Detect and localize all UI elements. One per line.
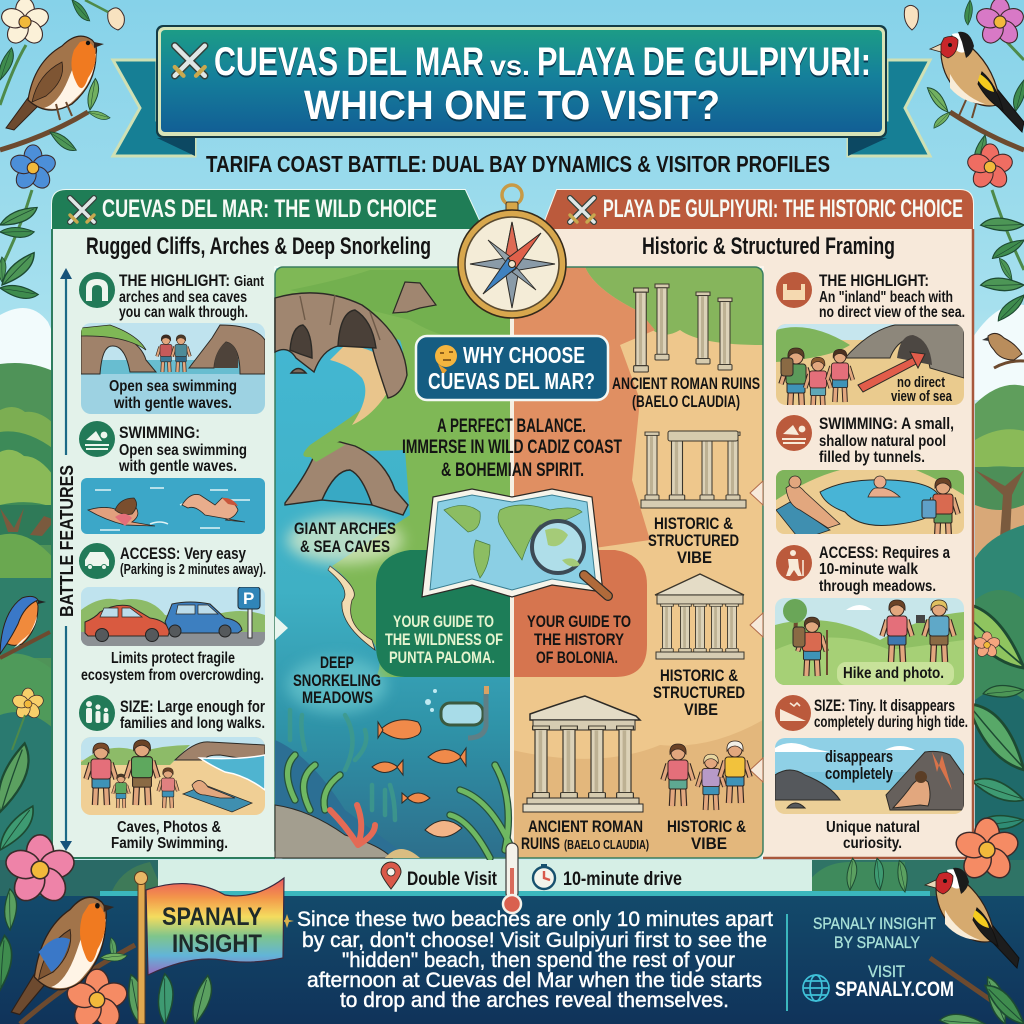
label: giant arches: [294, 519, 396, 556]
label: historic vibe two: HISTORIC &: [660, 666, 738, 685]
text: highlight: THE HIGHLIGHT:: [119, 271, 230, 290]
arrow: battle features: [57, 268, 77, 851]
feature: access right: [775, 543, 964, 685]
caption: [825, 748, 894, 783]
caption: view of sea: [891, 389, 953, 405]
illustration: fish group: [372, 720, 466, 837]
text: access: [819, 543, 950, 595]
panel: Playa de Gulpiyuri: [542, 190, 973, 858]
icon: car: [79, 543, 115, 579]
feature: highlight left: [79, 271, 265, 414]
icon: map pin: [381, 862, 401, 889]
central illustrated map: [275, 267, 763, 858]
heading line one: CUEVAS DEL MAR: [214, 40, 484, 84]
label: deep snorkeling: DEEP: [320, 653, 354, 672]
decorative top-right flora: [904, 0, 1024, 321]
feature: highlight right: [776, 271, 965, 410]
panel subheading: Rugged Cliffs, Arches & Deep Snorkeling: [86, 233, 431, 260]
icon: red flower: [965, 144, 1015, 191]
text: size: SIZE: Large enough for: [120, 697, 265, 716]
text: spanaly insight body: "hidden" beach, then spend the rest of your: [342, 948, 735, 972]
guide blocks: [376, 550, 512, 677]
callout: why choose: [416, 336, 608, 400]
icon: swords: [570, 198, 594, 222]
icon: swimmer: [776, 415, 812, 451]
text: size: [814, 697, 968, 731]
text: attribution: [813, 914, 954, 1001]
icon: coral flower: [953, 818, 1021, 883]
label: deep snorkeling: SNORKELING: [293, 671, 381, 690]
icon: blue flower: [8, 145, 58, 192]
label: ancient roman ruins bottom: ANCIENT ROMAN: [528, 817, 643, 836]
text: access: ACCESS: Requires a: [819, 543, 950, 562]
icon: goldfinch footer: [925, 868, 1019, 968]
icon: sparkle: [280, 914, 294, 928]
icon: arch: [79, 272, 115, 308]
icon: pink flower: [2, 835, 78, 906]
text: swimming: shallow natural pool: [819, 433, 946, 450]
text: guide wildness: YOUR GUIDE TO: [393, 613, 494, 631]
illustration: natural pool: [776, 470, 964, 540]
text: size: SIZE: Tiny. It disappears: [814, 697, 955, 715]
label: giant arches: GIANT ARCHES: [294, 519, 396, 538]
label: deep snorkeling: MEADOWS: [302, 688, 373, 707]
illustration: hidden cave: [776, 324, 964, 410]
text: spanaly insight body: [297, 907, 773, 1012]
caption: Open sea swimming: [109, 378, 237, 395]
label: historic vibe three: HISTORIC &: [667, 817, 746, 836]
heading line one: vs.: [490, 50, 530, 81]
illustration: family beach: [81, 737, 265, 815]
panel header: [52, 190, 483, 229]
caption: ecosystem from overcrowding.: [81, 667, 264, 684]
text: size: families and long walks.: [120, 715, 265, 732]
icon: stopwatch: [533, 864, 555, 889]
label: historic vibe one: [648, 514, 739, 567]
icon: yellow flower left: [11, 688, 45, 720]
heading line two: WHICH ONE TO VISIT?: [304, 82, 720, 128]
text: access: ACCESS: Very easy: [120, 544, 246, 563]
illustration: arches scene: [81, 323, 265, 414]
strip: double visit: [100, 860, 930, 896]
text: guide wildness: [385, 613, 503, 667]
label: ancient roman ruins bottom: (BAELO CLAUDIA): [564, 837, 649, 852]
icon: tide slope: [775, 695, 811, 731]
panel pointers: [275, 616, 288, 782]
bottom-right flora: [842, 818, 1024, 1024]
label: historic vibe three: [667, 817, 746, 853]
footer bar: [0, 896, 1024, 1024]
text: swimming: filled by tunnels.: [819, 449, 925, 466]
title banner: [113, 25, 930, 156]
illustration: parked cars: [81, 587, 265, 646]
text: guide history: OF BOLONIA.: [536, 649, 618, 667]
label: historic vibe two: [653, 666, 745, 719]
text: spanaly insight body: by car, don't choose! Visit Gulpiyuri first to see the: [302, 928, 767, 952]
icon: goldfinch top right: [930, 32, 1024, 132]
caption: with gentle waves.: [113, 395, 232, 412]
icon: family: [79, 695, 115, 731]
caption: Caves, Photos &: [117, 819, 221, 836]
text: size: completely during high tide.: [814, 714, 968, 731]
icon: cream bud: [108, 8, 124, 30]
label: ancient roman ruins bottom: RUINS: [521, 834, 560, 853]
panel subheading: Historic & Structured Framing: [642, 233, 895, 260]
decorative right leaves: [952, 588, 1024, 833]
ruins: colonnade: [641, 431, 746, 508]
illustration: swimmers: [81, 478, 265, 534]
strip: double visit: Double Visit: [407, 869, 498, 890]
ruins: four columns: [634, 284, 732, 372]
icon: parking sign: [238, 587, 260, 638]
illustration: big sea cave: [275, 293, 407, 398]
panel: Cuevas del Mar: [52, 190, 483, 858]
caption pill: [837, 662, 954, 685]
text: access: 10-minute walk: [819, 561, 918, 578]
text: perfect balance: IMMERSE IN WILD CADIZ COAST: [402, 437, 622, 458]
caption: curiosity.: [843, 835, 902, 852]
label: historic vibe three: VIBE: [691, 834, 727, 853]
icon: snorkel mask: [425, 686, 489, 738]
text: perfect balance: [402, 416, 622, 481]
flag: spanaly insight: INSIGHT: [172, 930, 262, 958]
text: attribution: VISIT: [868, 962, 905, 981]
text: attribution: SPANALY INSIGHT: [813, 914, 936, 933]
caption: Limits protect fragile: [111, 650, 235, 667]
compass: [458, 185, 566, 318]
text: guide history: THE HISTORY: [534, 631, 624, 649]
text: highlight: you can walk through.: [119, 304, 248, 321]
bottom-left flora: [0, 835, 221, 1024]
icon: small brown bird: [982, 333, 1024, 368]
text: spanaly insight body: to drop and the arches reveal themselves.: [340, 988, 729, 1012]
icon: globe: [803, 975, 829, 1001]
label: historic vibe one: VIBE: [677, 548, 712, 567]
thermometer: [503, 843, 521, 913]
label: historic vibe one: STRUCTURED: [648, 531, 739, 550]
icon: robin footer: [11, 897, 114, 1014]
icon: purple flower: [974, 0, 1024, 47]
icon: robin top left: [6, 36, 104, 130]
caption: [826, 819, 920, 852]
label: battle features: BATTLE FEATURES: [57, 465, 77, 617]
text: access: [120, 544, 266, 578]
text: access: (Parking is 2 minutes away).: [120, 561, 266, 578]
right half: base: [514, 268, 762, 759]
feature: swimming right: [776, 414, 964, 540]
caption: disappears: [825, 748, 893, 766]
left half: sea: [276, 339, 510, 858]
caption: [81, 650, 264, 684]
icon: thinking face: [435, 345, 457, 375]
decorative top-left flora: [0, 0, 124, 305]
ruins: temple: [655, 574, 744, 659]
text: size: [120, 697, 265, 732]
text: guide wildness: THE WILDNESS OF: [385, 631, 503, 649]
illustration: small rock: [393, 282, 436, 313]
caption: Family Swimming.: [111, 835, 228, 852]
text: swimming: [819, 414, 954, 466]
label: ancient roman ruins top: [612, 375, 760, 411]
callout: why choose: CUEVAS DEL MAR?: [428, 368, 595, 394]
caption: [111, 819, 228, 852]
icon: cream flower: [0, 0, 51, 47]
text: highlight: [819, 271, 965, 321]
label: ancient roman ruins top: ANCIENT ROMAN RUINS: [612, 375, 760, 393]
beach sand: [330, 347, 386, 425]
text: perfect balance: A PERFECT BALANCE.: [437, 416, 586, 437]
text: spanaly insight body: Since these two beaches are only 10 minutes apart: [297, 907, 773, 931]
feature: swimming left: [79, 421, 265, 534]
caption: Unique natural: [826, 819, 920, 836]
label: historic vibe two: VIBE: [684, 700, 718, 719]
heading line one: [214, 40, 871, 84]
feature: size right: [775, 695, 968, 852]
text: access: through meadows.: [819, 578, 936, 595]
illustration: sea arch: [285, 442, 408, 515]
caption: [891, 376, 952, 401]
text: highlight: An "inland" beach with: [819, 289, 953, 306]
caption: completely: [825, 765, 894, 783]
text: swimming: with gentle waves.: [118, 458, 237, 475]
caption: no direct: [897, 375, 945, 391]
icon: orange flower: [64, 969, 130, 1024]
text: swimming: SWIMMING: A small,: [819, 414, 954, 433]
text: swimming: [118, 423, 247, 475]
lower foliage band: [0, 860, 1024, 896]
text: highlight: arches and sea caves: [119, 289, 247, 306]
icon: crossed swords: [175, 46, 205, 76]
icon: bluebird left: [0, 596, 50, 658]
flag: spanaly insight: [134, 872, 284, 1024]
panel header: [542, 190, 973, 229]
label: deep snorkeling: [293, 653, 381, 707]
ruins: large temple: [523, 696, 643, 812]
icon: swimmer: [79, 421, 115, 457]
flag: spanaly insight: SPANALY: [162, 903, 262, 931]
text: guide history: [527, 613, 631, 667]
text: guide wildness: PUNTA PALOMA.: [389, 649, 495, 667]
label: historic vibe one: HISTORIC &: [654, 514, 733, 533]
text: highlight: [119, 271, 264, 321]
text: spanaly insight body: afternoon at Cuevas del Mar when the tide starts: [307, 968, 762, 992]
strip: double visit: 10-minute drive: [563, 869, 682, 890]
illustration: hike scene: [775, 598, 964, 685]
text: swimming: Open sea swimming: [119, 442, 247, 459]
text: highlight: no direct view of the sea.: [819, 304, 965, 321]
text: attribution: SPANALY.COM: [835, 978, 954, 1001]
label glow: [287, 516, 403, 564]
text: guide history: YOUR GUIDE TO: [527, 613, 631, 631]
icon: swords: [70, 198, 94, 222]
icon: cream bud right: [904, 5, 918, 30]
panel header: CUEVAS DEL MAR: THE WILD CHOICE: [102, 195, 437, 223]
text: swimming: SWIMMING:: [119, 423, 200, 442]
feature: access left: [79, 543, 266, 684]
text: highlight: Giant: [234, 273, 264, 290]
text: attribution: BY SPANALY: [834, 933, 920, 952]
illustration: underwater reef: [275, 710, 510, 858]
icon: folded world map with magnifier: [422, 489, 608, 597]
icon: orange blossom small: [973, 632, 1001, 659]
illustration: tourists: [663, 741, 750, 810]
icon: ruins: [776, 272, 812, 308]
label: ancient roman ruins top: (BAELO CLAUDIA): [632, 393, 740, 411]
caption: [109, 378, 237, 412]
callout: why choose: WHY CHOOSE: [463, 342, 585, 368]
illustration: high tide scene: [775, 738, 964, 814]
icon: parking sign: P: [243, 589, 254, 608]
text: perfect balance: & BOHEMIAN SPIRIT.: [441, 460, 584, 481]
icon: hiker: [776, 545, 812, 581]
left half: land: [275, 267, 512, 677]
caption pill: Hike and photo.: [843, 665, 944, 682]
feature: size left: [79, 695, 265, 852]
ribbon tails: [113, 60, 930, 156]
label: historic vibe two: STRUCTURED: [653, 683, 745, 702]
text: highlight: THE HIGHLIGHT:: [819, 271, 929, 290]
heading line one: PLAYA DE GULPIYURI:: [537, 40, 871, 84]
subtitle: TARIFA COAST BATTLE: DUAL BAY DYNAMICS & VISITOR PROFILES: [206, 151, 830, 177]
label: giant arches: & SEA CAVES: [300, 537, 390, 556]
decorative left leaves: [0, 715, 43, 851]
label: ancient roman ruins bottom: [521, 817, 649, 853]
